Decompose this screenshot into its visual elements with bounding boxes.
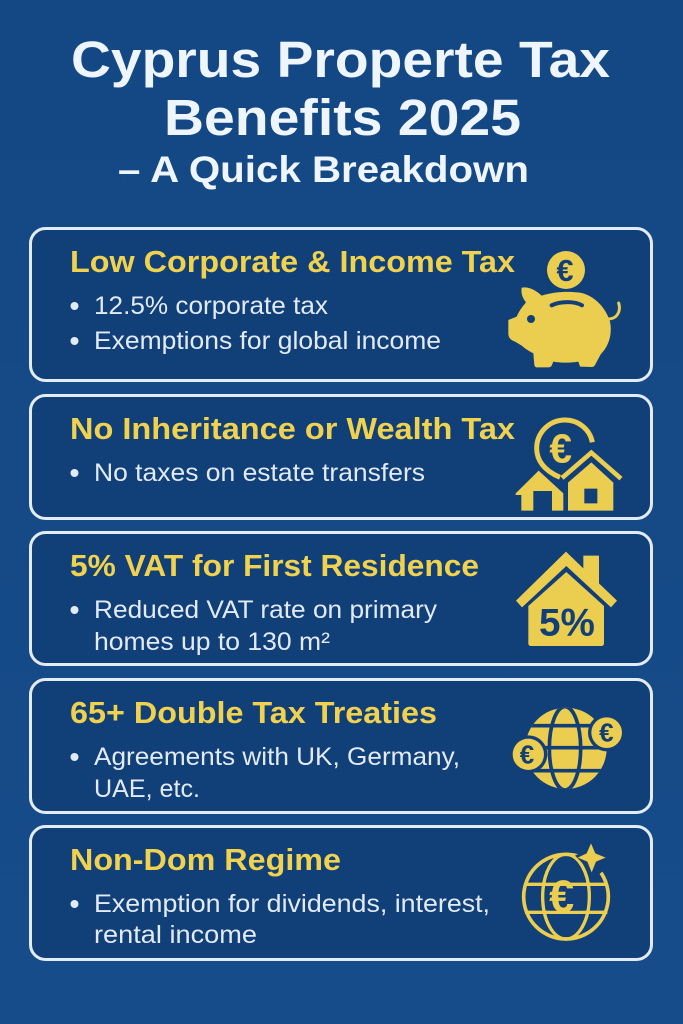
bullet list: exemption: rental income	[94, 921, 257, 949]
bullet list: exemption: Exemption for dividends, interest,	[94, 890, 490, 918]
icon: house with 5 percent: 5%	[539, 601, 595, 644]
title: Cyprus Properte Tax	[71, 31, 610, 88]
icon: globe with euro coins	[509, 707, 625, 790]
bullet list: reduced VAT: Reduced VAT rate on primary	[94, 596, 438, 624]
panel: non-dom regime	[30, 826, 652, 960]
icon: globe with euro and star	[524, 843, 608, 939]
heading: no inheritance or wealth tax: No Inheritance or Wealth Tax	[70, 411, 516, 446]
icon: globe with euro coins: €	[599, 718, 614, 748]
bullet list: exemption	[70, 890, 490, 949]
icon: globe with euro coins: €	[520, 739, 534, 769]
bullet list: corporate tax points: Exemptions for global income	[94, 327, 441, 355]
panel: low corporate and income tax	[30, 228, 652, 380]
heading: non-dom regime: Non-Dom Regime	[70, 842, 341, 877]
bullet list: reduced VAT	[70, 596, 438, 656]
bullet list: agreements: Agreements with UK, Germany,	[94, 743, 460, 771]
panel: no inheritance or wealth tax	[30, 396, 652, 518]
title	[71, 31, 610, 190]
bullet list: corporate tax points	[70, 292, 441, 355]
icon: piggy bank with euro coin: €	[556, 254, 574, 288]
icon: euro coin arc over two houses	[516, 420, 621, 511]
panel: 65+ double tax treaties	[30, 680, 652, 812]
icon: globe with euro and star: €	[549, 871, 574, 922]
heading: 65+ double tax treaties: 65+ Double Tax Treaties	[70, 695, 437, 730]
bullet list: corporate tax points: 12.5% corporate tax	[94, 292, 329, 320]
bullet list: agreements: UAE, etc.	[94, 775, 200, 803]
icon: piggy bank with euro coin	[508, 251, 619, 367]
title: – A Quick Breakdown	[118, 149, 529, 190]
icon: euro coin arc over two houses: €	[549, 425, 572, 471]
heading: low corporate and income tax: Low Corporate & Income Tax	[70, 244, 516, 279]
title: Benefits 2025	[164, 89, 521, 146]
heading: 5% VAT for first residence: 5% VAT for First Residence	[70, 548, 479, 583]
bullet list: reduced VAT: homes up to 130 m²	[94, 628, 330, 656]
icon: house with 5 percent	[516, 552, 617, 646]
panel: 5% VAT for first residence	[30, 532, 652, 664]
bullet list: agreements	[70, 743, 460, 803]
bullet list: estate transfers: No taxes on estate transfers	[94, 459, 425, 487]
